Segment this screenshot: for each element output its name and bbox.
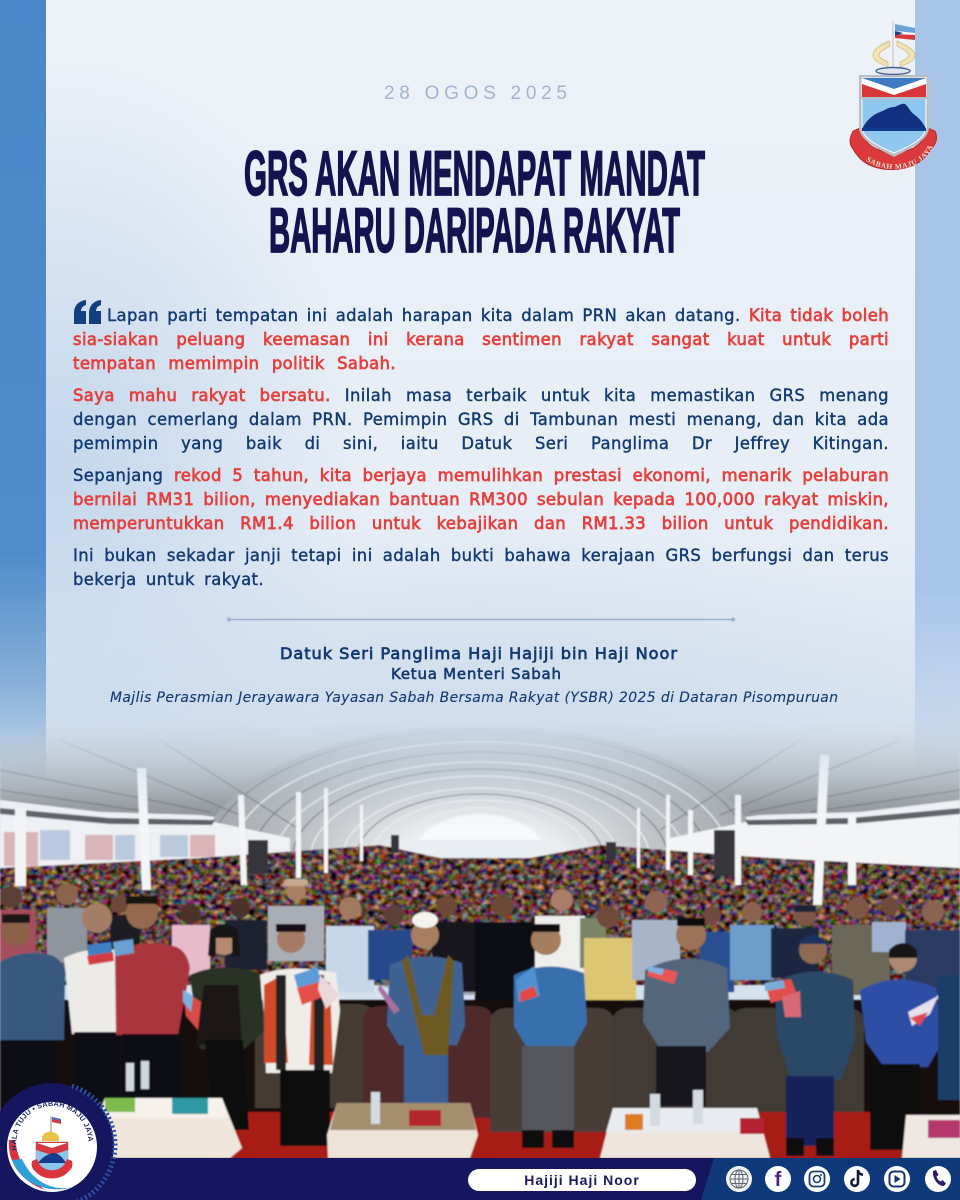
text block: quote paragraph 4: Ini bukan sekadar janji tetapi ini adalah bukti bahawa kerajaan GRS berfungsi dan terus <box>73 546 889 565</box>
pill: page name: Hajiji Haji Noor <box>524 1172 640 1188</box>
text block: quote paragraph 2: dengan cemerlang dalam PRN. Pemimpin GRS di Tambunan mesti menang, dan kita ada <box>73 410 889 429</box>
stage floor and sofas <box>0 1000 960 1160</box>
text block: quote paragraph 2 <box>73 386 889 453</box>
text block: quote paragraph 1 <box>73 306 889 373</box>
guest 8 <box>643 918 730 1106</box>
flags <box>87 939 938 1030</box>
attribution: speaker name, role and event <box>110 644 838 706</box>
icon: youtube <box>884 1166 910 1192</box>
text block: quote paragraph 3: bernilai RM31 bilion, menyediakan bantuan RM300 sebulan kepada 100,000 rakyat miskin, <box>73 490 889 509</box>
icon: phone <box>925 1166 951 1192</box>
guest 5 <box>260 924 340 1146</box>
date: 28 OGOS 2025 <box>384 83 567 104</box>
attribution: speaker name, role and event: Majlis Perasmian Jerayawara Yayasan Sabah Bersama Rakyat (YSBR) 2025 di Dataran Pisompuruan <box>110 690 838 706</box>
icon: facebook <box>765 1166 791 1192</box>
text block: quote paragraph 2: pemimpin yang baik di sini, iaitu Datuk Seri Panglima Dr Jeffrey Kitingan. <box>73 434 889 453</box>
guest 7 <box>514 924 587 1148</box>
text block: quote paragraph 2: Saya mahu rakyat bersatu. Inilah masa terbaik untuk kita memastikan GRS menang <box>73 386 889 405</box>
text block: quote paragraph 4 <box>73 546 889 589</box>
crowd: middle row <box>0 879 960 1012</box>
guest 2 <box>64 903 124 1102</box>
text block: quote paragraph 3 <box>73 466 889 533</box>
attribution: speaker name, role and event: Datuk Seri Panglima Haji Hajiji bin Haji Noor <box>280 644 677 663</box>
icon: tiktok <box>844 1166 870 1192</box>
pill: page name <box>468 1169 696 1191</box>
canopy background <box>0 800 960 821</box>
photo: crowd under canopy <box>0 730 960 1158</box>
text block: quote paragraph 1: sia-siakan peluang keemasan ini kerana sentimen rakyat sangat kuat untuk parti <box>73 330 889 349</box>
canopy posts <box>15 755 856 905</box>
guest 10 <box>860 943 942 1150</box>
icon: facebook: f <box>775 1169 782 1191</box>
text block: quote paragraph 1: tempatan memimpin politik Sabah. <box>73 354 396 373</box>
icon: Sabah coat of arms <box>850 21 937 170</box>
title <box>244 139 706 266</box>
quote mark icon <box>74 300 101 324</box>
text block: quote paragraph 3: Sepanjang rekod 5 tahun, kita berjaya memulihkan prestasi ekonomi, menarik pelaburan <box>73 466 889 485</box>
icon: globe <box>726 1166 752 1192</box>
icon: instagram <box>804 1166 830 1192</box>
guest 4 <box>190 924 264 1130</box>
attribution: speaker name, role and event: Ketua Menteri Sabah <box>391 665 561 683</box>
tables <box>96 1098 960 1158</box>
guest 3 <box>115 896 190 1102</box>
guest 9 <box>775 935 855 1156</box>
logo badge: Hala Tuju Sabah Maju Jaya: HALA TUJU • SABAH MAJU JAYA <box>11 1101 94 1150</box>
guest 1 <box>0 914 65 1102</box>
logo badge: Hala Tuju Sabah Maju Jaya <box>0 1083 118 1200</box>
text block: quote paragraph 1: Lapan parti tempatan ini adalah harapan kita dalam PRN akan datang. Kita tidak boleh <box>107 306 889 325</box>
icon: Sabah coat of arms: SABAH MAJU JAYA <box>866 146 933 170</box>
text block: quote paragraph 4: bekerja untuk rakyat. <box>73 570 264 589</box>
guest 11 <box>938 975 960 1100</box>
table items <box>105 1061 960 1138</box>
dignitaries: front row <box>0 896 960 1156</box>
crowd: back rows <box>0 845 960 985</box>
text block: quote paragraph 3: memperuntukkan RM1.4 bilion untuk kebajikan dan RM1.33 bilion untuk pendidikan. <box>73 514 889 533</box>
chief minister <box>387 912 465 1106</box>
